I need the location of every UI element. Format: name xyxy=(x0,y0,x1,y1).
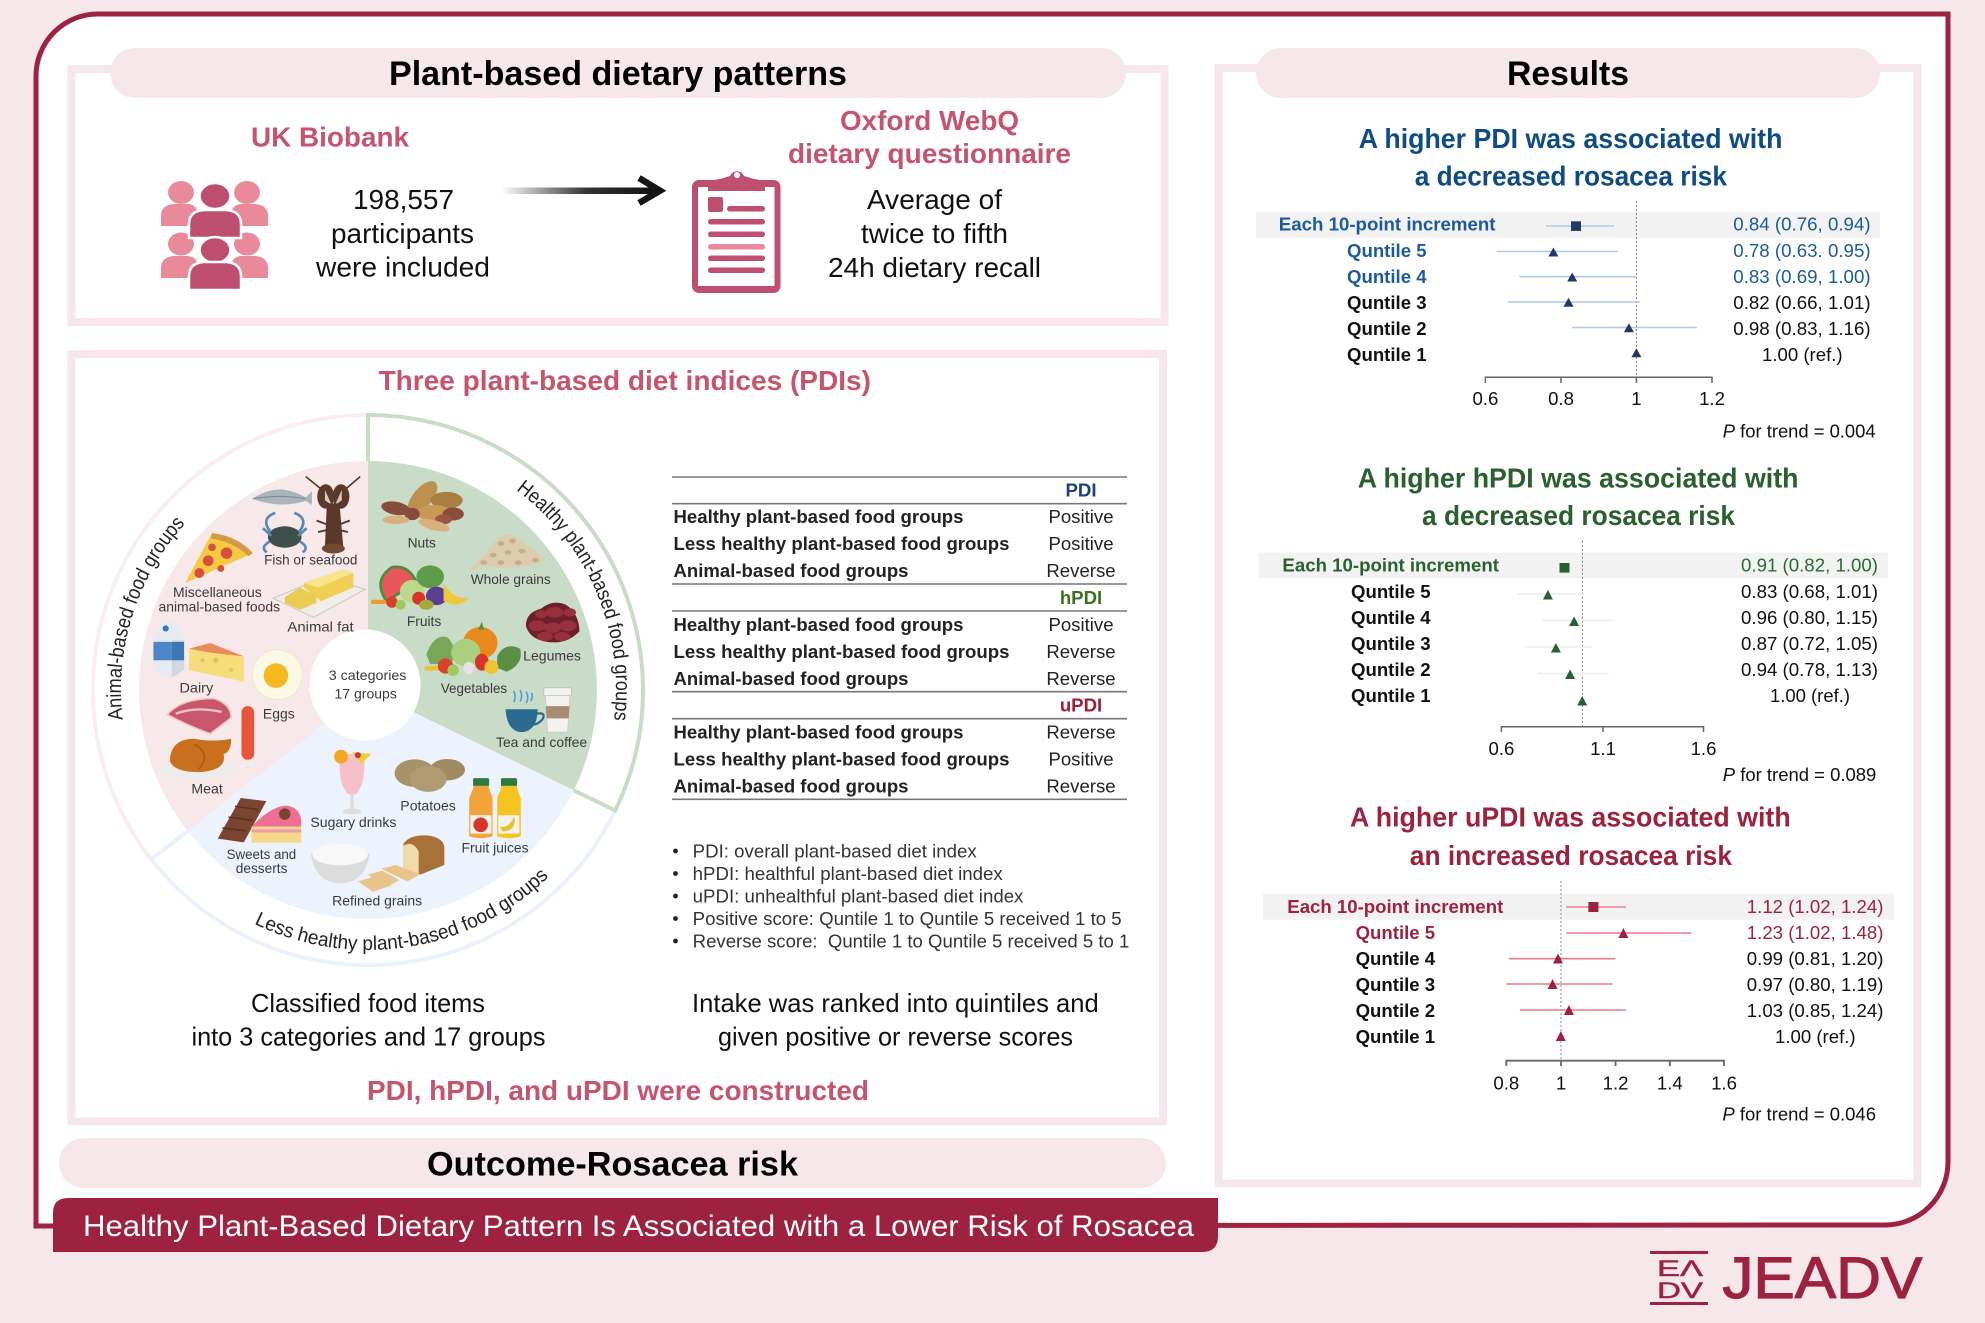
PDI axis: 0.8 xyxy=(1548,388,1574,409)
PDI row labels: Quntile 1 xyxy=(1347,344,1427,365)
uPDI values: 0.99 (0.81, 1.20) xyxy=(1747,948,1883,969)
table rows: hPDI: Reverse xyxy=(1046,668,1116,689)
PDI row labels: Quntile 2 xyxy=(1347,318,1427,339)
uPDI values: 1.03 (0.85, 1.24) xyxy=(1747,1000,1883,1021)
table rows: PDI: Healthy plant-based food groups xyxy=(674,506,964,527)
food: tea and coffee: Tea and coffee xyxy=(496,735,587,750)
uPDI values: 1.12 (1.02, 1.24) xyxy=(1747,896,1883,917)
PDI axis: 0.6 xyxy=(1472,388,1498,409)
logo: JEADV: DV xyxy=(1657,1278,1703,1303)
food: sugary drinks xyxy=(310,750,397,830)
caption: intake ranked: given positive or reverse scores xyxy=(718,1022,1073,1052)
food: vegetables xyxy=(424,622,521,696)
caption: classified food items: Classified food items xyxy=(251,988,485,1018)
PDI values: 0.82 (0.66, 1.01) xyxy=(1733,292,1871,313)
panel: plant-based dietary patterns xyxy=(72,48,1164,322)
uPDI row labels: Quntile 4 xyxy=(1356,948,1436,969)
table rows: PDI: Animal-based food groups xyxy=(674,560,908,581)
chart: food group wheel xyxy=(91,413,645,967)
hPDI axis: 1.6 xyxy=(1691,738,1716,759)
outcome pill xyxy=(59,1138,1166,1188)
center label xyxy=(329,668,407,702)
table rows: uPDI: Healthy plant-based food groups xyxy=(674,722,964,742)
uPDI axis xyxy=(1493,1061,1737,1093)
table rows: uPDI: Positive xyxy=(1048,748,1114,770)
food: nuts: Nuts xyxy=(408,535,436,550)
food: fish or seafood: Fish or seafood xyxy=(264,553,357,568)
center label: 3 categories xyxy=(329,668,407,683)
PDI axis: 1 xyxy=(1631,388,1642,409)
uPDI row labels: Quntile 5 xyxy=(1356,922,1435,943)
PDI values: 0.84 (0.76, 0.94) xyxy=(1733,214,1871,234)
PDI values: 1.00 (ref.) xyxy=(1762,344,1843,365)
Oxford WebQ label: dietary questionnaire xyxy=(788,138,1071,169)
PDI title: A higher PDI was associated with xyxy=(1359,123,1782,154)
dietary recall text: twice to fifth xyxy=(861,218,1008,249)
table rows: uPDI: Less healthy plant-based food groups xyxy=(674,748,1010,770)
outcome pill: Outcome-Rosacea risk xyxy=(427,1146,798,1184)
food: fish or seafood xyxy=(252,477,360,568)
legend notes: Positive score: Quntile 1 to Quntile 5 received 1 to 5 xyxy=(693,909,1122,929)
table rows: hPDI: Animal-based food groups xyxy=(674,668,908,689)
table rows: PDI: Less healthy plant-based food groups xyxy=(674,533,1010,554)
PDI row labels: Quntile 3 xyxy=(1347,292,1427,313)
PDI row labels: Each 10-point increment xyxy=(1279,214,1496,234)
food: sweets and desserts: desserts xyxy=(236,861,288,876)
heading: indices constructed: PDI, hPDI, and uPDI were constructed xyxy=(367,1075,869,1106)
table rows: uPDI xyxy=(674,722,1116,796)
icon: clipboard xyxy=(692,171,780,293)
legend notes: hPDI: healthful plant-based diet index xyxy=(693,864,1003,884)
uPDI row labels: Quntile 1 xyxy=(1356,1026,1435,1047)
table rows: hPDI: Healthy plant-based food groups xyxy=(674,614,964,635)
hPDI values xyxy=(1741,554,1878,706)
food: eggs: Eggs xyxy=(263,706,295,721)
food: legumes xyxy=(523,603,581,664)
food: legumes: Legumes xyxy=(523,649,581,664)
participants text: 198,557 xyxy=(353,184,454,215)
PDI row labels: Quntile 5 xyxy=(1347,240,1427,261)
legend notes: Reverse score: Quntile 1 to Quntile 5 received 5 to 1 xyxy=(693,932,1129,952)
uPDI axis: 1.6 xyxy=(1711,1072,1737,1093)
icon: participants group xyxy=(161,181,268,290)
hPDI values: 0.91 (0.82, 1.00) xyxy=(1741,554,1878,576)
logo: JEADV xyxy=(1650,1246,1923,1311)
forest plot: hPDI xyxy=(1259,463,1888,785)
Oxford WebQ label xyxy=(788,105,1071,169)
uPDI axis: 1.2 xyxy=(1603,1072,1629,1093)
food: fruits xyxy=(371,565,469,629)
forest plot: uPDI xyxy=(1263,802,1894,1124)
center label: 17 groups xyxy=(334,687,397,702)
table rows: hPDI xyxy=(674,614,1116,689)
food: fruit juices: Fruit juices xyxy=(462,841,529,856)
uPDI title: an increased rosacea risk xyxy=(1410,840,1732,871)
uPDI values: 1.00 (ref.) xyxy=(1775,1026,1856,1047)
hPDI title: A higher hPDI was associated with xyxy=(1358,463,1798,494)
uPDI values: 1.23 (1.02, 1.48) xyxy=(1747,922,1883,943)
Oxford WebQ label: Oxford WebQ xyxy=(840,105,1019,136)
food: tea and coffee xyxy=(496,688,587,750)
uPDI axis: 1 xyxy=(1556,1072,1566,1093)
label: healthy plant-based food groups: Healthy plant-based food groups xyxy=(517,480,629,720)
uPDI row labels: Each 10-point increment xyxy=(1287,896,1503,917)
dietary recall text: 24h dietary recall xyxy=(828,252,1041,283)
table rows: PDI: Reverse xyxy=(1046,560,1116,581)
hPDI axis xyxy=(1488,727,1716,759)
heading pill: results: Results xyxy=(1507,55,1629,93)
uPDI p for trend: P for trend = 0.046 xyxy=(1722,1104,1876,1124)
hPDI row labels: Each 10-point increment xyxy=(1282,554,1499,576)
PDI row labels xyxy=(1279,214,1496,365)
PDI values xyxy=(1733,214,1871,365)
uPDI axis: 0.8 xyxy=(1493,1072,1519,1093)
PDI axis: 1.2 xyxy=(1699,388,1725,409)
hPDI row labels: Quntile 1 xyxy=(1351,685,1431,706)
food: meat xyxy=(160,699,254,796)
food: animal fat xyxy=(273,569,365,635)
heading: three indices: Three plant-based diet indices (PDIs) xyxy=(378,365,871,396)
food: miscellaneous animal-based: animal-based foods xyxy=(158,599,280,614)
legend notes xyxy=(673,842,1129,952)
uPDI values: 0.97 (0.80, 1.19) xyxy=(1747,974,1883,995)
food: nuts xyxy=(380,476,464,550)
table rows: hPDI: Less healthy plant-based food groups xyxy=(674,641,1010,662)
participants text xyxy=(315,184,490,282)
hPDI title: a decreased rosacea risk xyxy=(1422,500,1735,531)
uPDI row labels: Quntile 2 xyxy=(1356,1000,1435,1021)
PDI confidence intervals and markers xyxy=(1497,221,1697,357)
table rows: PDI: Positive xyxy=(1048,506,1114,527)
hPDI p for trend: P for trend = 0.089 xyxy=(1723,764,1876,785)
table rows: hPDI: Positive xyxy=(1048,614,1114,635)
logo: JEADV: EΛ xyxy=(1657,1256,1703,1281)
heading pill: results xyxy=(1256,48,1880,98)
table rows: hPDI: Reverse xyxy=(1046,641,1116,662)
food: whole grains xyxy=(470,535,551,587)
table rows: PDI xyxy=(674,506,1116,581)
table rows: PDI: Positive xyxy=(1048,533,1114,554)
food: refined grains: Refined grains xyxy=(332,894,422,909)
heading pill: plant-based dietary patterns xyxy=(110,48,1126,98)
hPDI row labels: Quntile 3 xyxy=(1351,633,1431,654)
table header: uPDI: uPDI xyxy=(1060,694,1102,716)
UK Biobank label: UK Biobank xyxy=(251,122,409,152)
food: meat: Meat xyxy=(191,781,223,796)
table: index scoring xyxy=(672,477,1127,799)
label: less healthy plant-based food groups: Less healthy plant-based food groups xyxy=(256,870,548,954)
hPDI values: 0.96 (0.80, 1.15) xyxy=(1741,607,1878,628)
hPDI row labels: Quntile 4 xyxy=(1351,607,1431,628)
food: whole grains: Whole grains xyxy=(471,572,551,587)
food: animal fat: Animal fat xyxy=(287,620,354,635)
hPDI axis: 0.6 xyxy=(1488,738,1514,759)
table rows: uPDI: Reverse xyxy=(1046,776,1116,796)
title banner: Healthy Plant-Based Dietary Pattern Is Associated with a Lower Risk of Rosacea xyxy=(83,1210,1194,1243)
food: sugary drinks: Sugary drinks xyxy=(310,815,397,830)
hPDI values: 0.83 (0.68, 1.01) xyxy=(1741,581,1878,602)
legend notes: uPDI: unhealthful plant-based diet index xyxy=(693,886,1023,906)
PDI title: a decreased rosacea risk xyxy=(1415,161,1727,192)
table header: hPDI: hPDI xyxy=(1060,587,1102,608)
title banner xyxy=(53,1198,1218,1252)
food: sweets and desserts xyxy=(218,798,301,876)
table rows: uPDI: Reverse xyxy=(1046,722,1116,742)
hPDI confidence intervals and markers xyxy=(1518,563,1612,706)
food: fruits: Fruits xyxy=(407,614,441,629)
PDI values: 0.78 (0.63. 0.95) xyxy=(1733,240,1871,261)
food: vegetables: Vegetables xyxy=(441,681,507,696)
caption: intake ranked: Intake was ranked into quintiles and xyxy=(692,988,1099,1018)
PDI p for trend: P for trend = 0.004 xyxy=(1723,420,1876,442)
PDI axis xyxy=(1472,377,1725,409)
participants text: were included xyxy=(315,252,490,282)
hPDI values: 1.00 (ref.) xyxy=(1770,685,1850,706)
caption: classified food items: into 3 categories and 17 groups xyxy=(192,1022,546,1052)
hPDI title xyxy=(1358,463,1798,531)
food: miscellaneous animal-based xyxy=(158,533,280,614)
uPDI title: A higher uPDI was associated with xyxy=(1350,802,1791,833)
uPDI confidence intervals and markers xyxy=(1506,902,1692,1041)
dietary recall text xyxy=(828,184,1041,283)
food: dairy xyxy=(153,623,244,695)
PDI values: 0.83 (0.69, 1.00) xyxy=(1733,266,1871,287)
food: fruit juices xyxy=(462,778,529,856)
hPDI values: 0.87 (0.72, 1.05) xyxy=(1741,633,1878,654)
caption: intake ranked xyxy=(692,988,1099,1052)
food: eggs xyxy=(252,650,303,721)
hPDI values: 0.94 (0.78, 1.13) xyxy=(1741,659,1878,680)
arrow xyxy=(501,178,660,203)
PDI values: 0.98 (0.83, 1.16) xyxy=(1733,318,1871,339)
dietary recall text: Average of xyxy=(867,184,1002,215)
PDI title xyxy=(1359,123,1782,192)
panel: three plant-based diet indices xyxy=(68,350,1167,1126)
uPDI row labels: Quntile 3 xyxy=(1356,974,1435,995)
uPDI axis: 1.4 xyxy=(1657,1072,1683,1093)
hPDI row labels: Quntile 5 xyxy=(1351,581,1431,602)
forest plot: PDI xyxy=(1256,123,1880,442)
food: potatoes xyxy=(395,759,465,814)
label: animal-based food groups: Animal-based food groups xyxy=(106,518,184,720)
food: miscellaneous animal-based: Miscellaneous xyxy=(173,585,262,600)
table header: PDI: PDI xyxy=(1066,480,1096,500)
hPDI axis: 1.1 xyxy=(1590,738,1616,759)
PDI row labels: Quntile 4 xyxy=(1347,266,1427,287)
food: refined grains xyxy=(311,835,444,909)
uPDI title xyxy=(1350,802,1791,871)
legend notes: PDI: overall plant-based diet index xyxy=(693,842,977,862)
table rows: uPDI: Animal-based food groups xyxy=(674,776,908,796)
hPDI row labels: Quntile 2 xyxy=(1351,659,1431,680)
heading pill: plant-based dietary patterns: Plant-based dietary patterns xyxy=(389,55,847,93)
uPDI row labels xyxy=(1287,896,1503,1047)
uPDI values xyxy=(1747,896,1883,1047)
panel: results xyxy=(1218,48,1918,1184)
participants text: participants xyxy=(331,218,474,249)
food: dairy: Dairy xyxy=(180,680,213,695)
hPDI row labels xyxy=(1282,554,1499,706)
caption: classified food items xyxy=(192,988,546,1052)
food: sweets and desserts: Sweets and xyxy=(227,847,296,862)
logo: JEADV: JEADV xyxy=(1722,1246,1923,1311)
food: potatoes: Potatoes xyxy=(400,799,456,814)
